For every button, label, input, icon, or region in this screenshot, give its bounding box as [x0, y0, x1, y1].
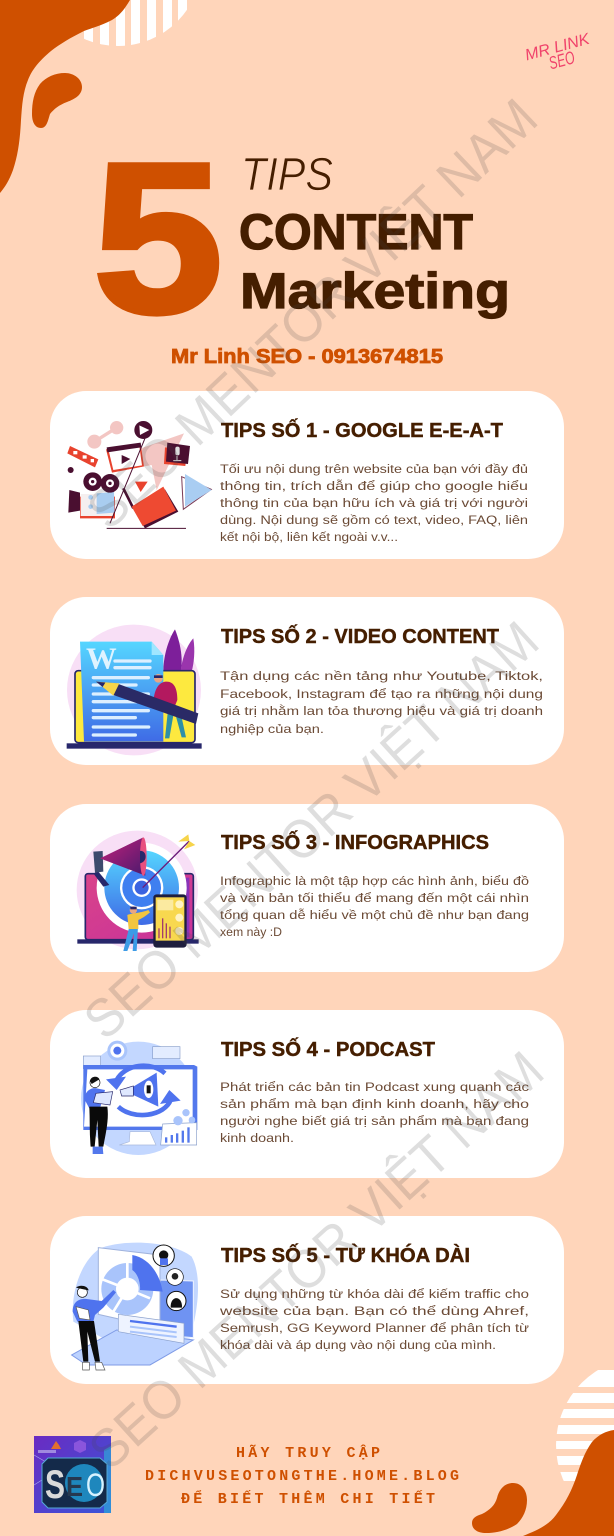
- badge: SEO image: S: [45, 1463, 65, 1507]
- body text: Sử dụng những từ khóa dài để kiếm traffic cho: [220, 1287, 529, 1301]
- body text: Tối ưu nội dung trên website của bạn với đầy đủ: [220, 462, 528, 476]
- panel: tip 1: [50, 391, 564, 559]
- body text: Infographic là một tập hợp các hình ảnh, biểu đồ: [220, 874, 529, 888]
- title block: [93, 119, 510, 358]
- body text: Semrush, GG Keyword Planner để phân tích từ: [220, 1321, 529, 1335]
- footer text: ĐỂ BIẾT THÊM CHI TIẾT: [181, 1490, 435, 1508]
- body text: xem này :D: [220, 925, 282, 939]
- icon: podcast megaphone and presenter: [81, 1041, 197, 1155]
- logo: Mr Link SEO: [523, 30, 597, 79]
- watermark 3: SEO MENTOR VIỆT NAM: [78, 1040, 555, 1481]
- body text: dùng. Nội dung sẽ gồm có text, video, FAQ, liên: [220, 513, 528, 527]
- body text: sản phẩm mà bạn định kinh doanh, hãy cho: [220, 1097, 529, 1111]
- watermark 1: SEO MENTOR VIỆT NAM: [76, 88, 549, 541]
- body text: [220, 1080, 529, 1145]
- subtitle: contact: Mr Linh SEO - 0913674815: [171, 346, 443, 368]
- heading: TIPS SỐ 4 - PODCAST: [221, 1037, 435, 1061]
- panel: tip 5: [50, 1216, 564, 1384]
- decoration: top-left blob: [0, 0, 130, 193]
- body text: Tận dụng các nền tảng như Youtube, Tiktok,: [220, 669, 543, 683]
- heading: TIPS SỐ 5 - TỪ KHÓA DÀI: [221, 1243, 470, 1267]
- title: CONTENT: CONTENT: [239, 204, 473, 260]
- icon: document and pencil on laptop: [67, 625, 202, 755]
- footer text: DICHVUSEOTONGTHE.HOME.BLOG: [145, 1468, 459, 1485]
- footer text: [145, 1444, 459, 1508]
- body text: người nghe biết giá trị sản phẩm mà bạn đang: [220, 1114, 529, 1128]
- body text: [219, 1287, 529, 1352]
- logo: Mr Link SEO: MR LINK: [523, 30, 593, 64]
- icon: analytics dashboard and presenter: [72, 1243, 198, 1370]
- badge: SEO image: E: [66, 1471, 83, 1502]
- body text: và văn bản tối thiểu để mang đến một cái nhìn: [220, 891, 529, 905]
- body text: thông tin, trích dẫn để giúp cho google hiểu: [220, 478, 528, 493]
- body text: tổng quan dễ hiểu về một chủ đề như bạn đang: [220, 907, 529, 922]
- panel: tip 3: [50, 804, 564, 972]
- badge: SEO image: O: [86, 1467, 105, 1503]
- decoration: bottom-right blob: [472, 1430, 614, 1536]
- heading: TIPS SỐ 3 - INFOGRAPHICS: [221, 830, 489, 854]
- decoration: bottom-right stripes: [550, 1370, 614, 1481]
- body text: [220, 874, 529, 939]
- body text: giá trị nhằm lan tỏa thương hiệu và giá trị doanh: [220, 703, 543, 718]
- big number 5: 5: [93, 119, 223, 358]
- icon: video and media collage: [67, 421, 212, 528]
- footer text: HÃY TRUY CẬP: [236, 1444, 380, 1462]
- icon: megaphone, target and tablet: [77, 831, 199, 951]
- icon: document and pencil on laptop: W: [86, 642, 117, 676]
- body text: khóa dài và áp dụng vào nội dung của mình.: [220, 1338, 496, 1352]
- body text: website của bạn. Bạn có thể dùng Ahref,: [219, 1304, 529, 1318]
- decoration: top-left stripes: [84, 0, 187, 50]
- title: Marketing: Marketing: [240, 263, 510, 319]
- badge: SEO image: [34, 1436, 111, 1513]
- body text: Phát triển các bản tin Podcast xung quanh các: [220, 1080, 529, 1094]
- body text: nghiệp của bạn.: [220, 722, 324, 736]
- title: TIPS: TIPS: [241, 148, 333, 200]
- heading: TIPS SỐ 1 - GOOGLE E-E-A-T: [221, 418, 503, 442]
- panel: tip 4: [50, 1010, 564, 1178]
- body text: [220, 462, 528, 544]
- panel: tip 2: [50, 597, 564, 765]
- logo: Mr Link SEO: SEO: [547, 47, 577, 73]
- body text: kết nội bộ, liên kết ngoài v.v...: [220, 530, 398, 544]
- body text: [220, 669, 543, 736]
- body text: Facebook, Instagram để tạo ra những nội dung: [220, 687, 543, 701]
- heading: TIPS SỐ 2 - VIDEO CONTENT: [221, 624, 499, 648]
- body text: kinh doanh.: [220, 1131, 294, 1145]
- body text: thông tin của bạn hữu ích và giá trị với người: [220, 496, 528, 510]
- watermark 2: SEO MENTOR VIỆT NAM: [73, 610, 550, 1051]
